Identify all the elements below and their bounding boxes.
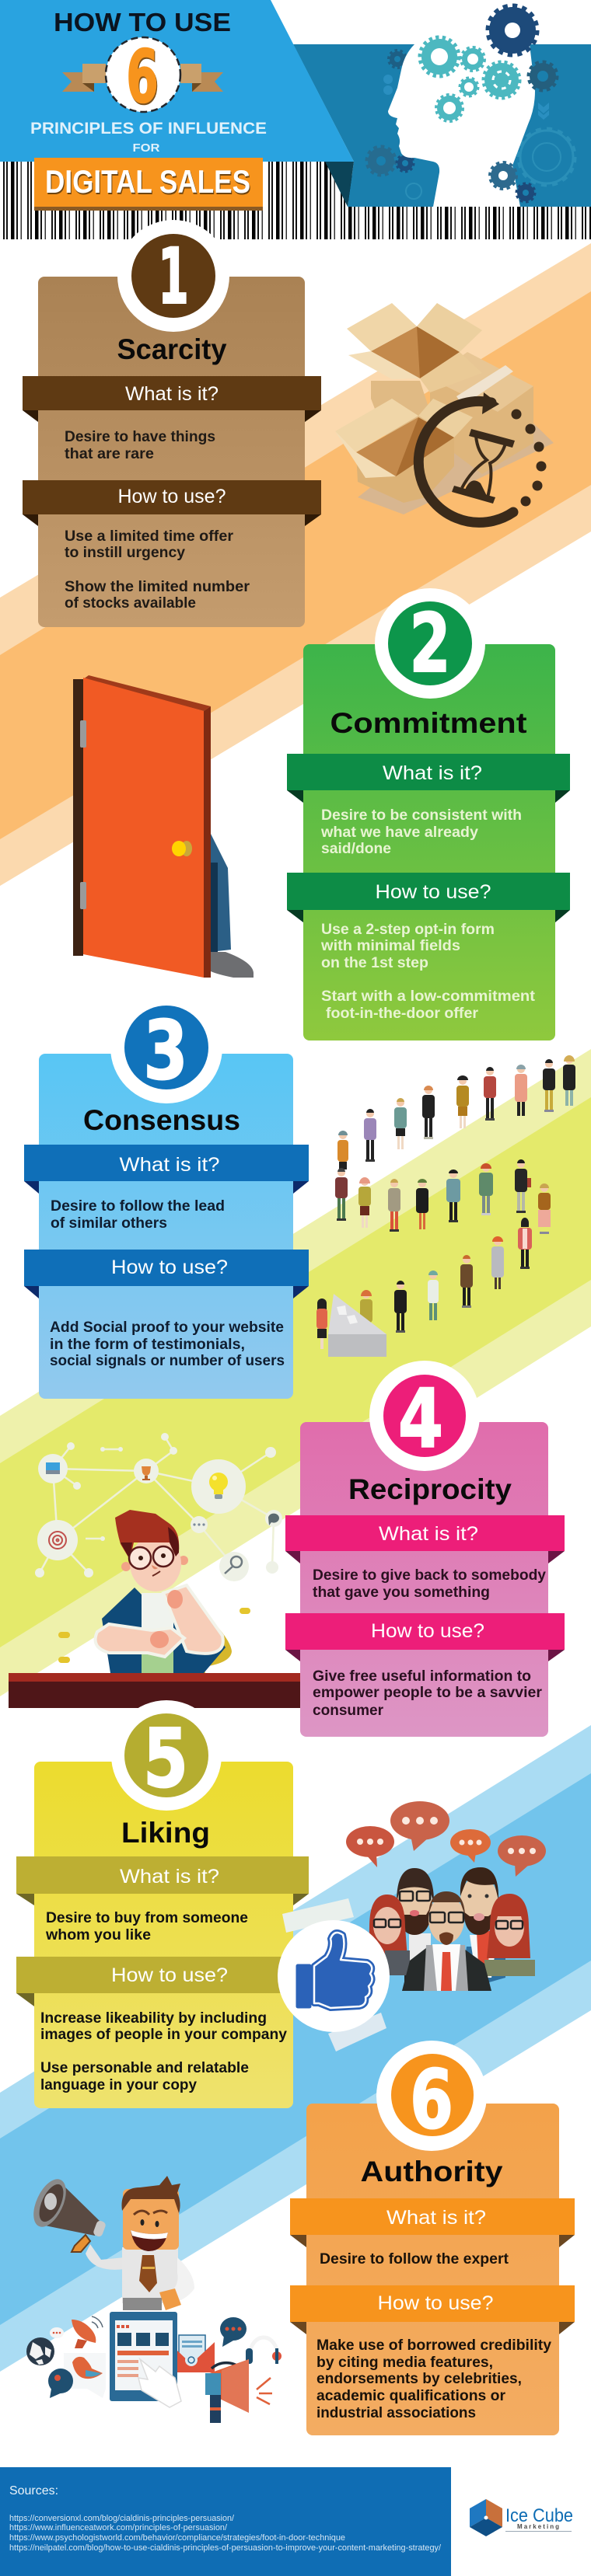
- illustration: door with foot: [73, 675, 254, 978]
- text: how to use liking: Increase likeability by including: [40, 2010, 267, 2027]
- panel: reciprocity: [285, 1361, 565, 1737]
- text: how to use scarcity: Use a limited time offer: [65, 528, 234, 545]
- leg behind door: [211, 834, 254, 978]
- panel: consensus: [24, 992, 309, 1399]
- icon: satellite dish: [72, 2316, 103, 2348]
- badge: number 5: 5: [143, 1711, 188, 1806]
- dark blue band with head: [293, 44, 591, 207]
- ribbon: what is it: [285, 1515, 565, 1563]
- ribbon: how to use: [285, 1613, 565, 1661]
- heading: scarcity: Scarcity: [117, 333, 227, 365]
- icon: headset: [246, 2337, 282, 2364]
- speech bubbles: [346, 1801, 546, 1877]
- orange box: digital sales: DIGITAL SALES: [45, 163, 250, 200]
- badge: number 3: [110, 992, 222, 1103]
- badge: number 4: 4: [398, 1372, 443, 1466]
- text: how to use authority: industrial associations: [316, 2405, 476, 2421]
- text: how to use consensus: in the form of testimonials,: [50, 1337, 245, 1353]
- illustration: man with megaphone and media icons: [26, 2174, 282, 2423]
- text: how to use liking: Use personable and relatable: [40, 2060, 249, 2076]
- badge: number 6: [106, 35, 180, 120]
- ribbon: what is it: What is it?: [120, 1866, 219, 1888]
- icon: orange megaphone: [205, 2359, 272, 2423]
- text: how to use authority: academic qualifications or: [316, 2388, 506, 2404]
- text: what is reciprocity: that gave you something: [313, 1584, 490, 1601]
- text: what is reciprocity: [313, 1567, 546, 1601]
- closed box: [430, 352, 533, 474]
- panel: authority: [290, 2041, 575, 2435]
- text: how to use scarcity: Show the limited number: [65, 579, 250, 595]
- text: how to use authority: [316, 2337, 551, 2421]
- heading: liking: Liking: [121, 1817, 210, 1849]
- ribbon: what is it: What is it?: [125, 383, 219, 405]
- idea network: [35, 1433, 282, 1581]
- ribbon: what is it: [287, 754, 570, 803]
- badge: number 6: 6: [410, 2052, 453, 2147]
- heading: authority: Authority: [361, 2156, 503, 2187]
- ribbon: what is it: What is it?: [379, 1523, 478, 1545]
- ribbon: how to use: How to use?: [111, 1257, 228, 1278]
- text: what is commitment: [320, 807, 522, 857]
- ribbon: what is it: What is it?: [383, 762, 482, 784]
- subheading: for: FOR: [132, 141, 160, 155]
- ribbon behind the 6 badge: [62, 64, 223, 92]
- heading: how to use: HOW TO USE: [54, 8, 231, 37]
- ribbon: how to use: How to use?: [111, 1964, 228, 1986]
- ribbon: what is it: What is it?: [386, 2207, 486, 2229]
- text: how to use consensus: [50, 1319, 285, 1369]
- source links: https://www.influenceatwork.com/principles-of-persuasion/: [9, 2523, 228, 2532]
- icon: light bulb: [209, 1473, 228, 1499]
- text: how to use authority: endorsements by celebrities,: [316, 2371, 522, 2387]
- ribbon: how to use: [287, 873, 570, 922]
- badge: number 3: 3: [143, 1003, 188, 1098]
- text: what is consensus: of similar others: [51, 1215, 167, 1232]
- text: how to use consensus: Add Social proof to your website: [50, 1319, 284, 1336]
- text: how to use authority: by citing media features,: [316, 2355, 493, 2371]
- text: what is consensus: Desire to follow the lead: [51, 1198, 225, 1215]
- badge: number 6: 6: [126, 35, 159, 120]
- background: orange diagonal bands: [0, 243, 591, 886]
- ribbon: how to use: [24, 1250, 309, 1298]
- ribbon: how to use: [16, 1957, 309, 2006]
- text: what is scarcity: that are rare: [65, 446, 154, 462]
- yellow pills: [58, 1608, 250, 1663]
- panel: scarcity: [23, 220, 321, 627]
- badge: number 2: [375, 588, 485, 699]
- centre man: [402, 1891, 491, 1991]
- text: what is liking: whom you like: [45, 1927, 151, 1943]
- man: [96, 1510, 232, 1673]
- text: how to use commitment: [320, 922, 536, 1022]
- barcode strip: [0, 162, 591, 239]
- icon: small bubble: [50, 2327, 64, 2338]
- subheading: principles of influence: PRINCIPLES OF INFLUENCE: [30, 120, 267, 138]
- text: what is commitment: Desire to be consistent with: [321, 807, 522, 824]
- icon: globe: [26, 2337, 54, 2365]
- illustration: cardboard boxes and hourglass: [335, 303, 554, 522]
- text: how to use reciprocity: consumer: [313, 1703, 384, 1719]
- text: how to use scarcity: to instill urgency: [65, 545, 185, 561]
- desk: [9, 1673, 300, 1708]
- text: how to use reciprocity: empower people to be a savvier: [313, 1685, 543, 1701]
- icon: wifi: [212, 2363, 241, 2381]
- text: what is consensus: [51, 1198, 225, 1232]
- text: how to use commitment: Start with a low-commitment: [321, 988, 536, 1005]
- ribbon: how to use: How to use?: [118, 486, 226, 507]
- header panel: [0, 0, 591, 211]
- ribbon: how to use: How to use?: [375, 881, 491, 903]
- text: how to use liking: [40, 2010, 287, 2093]
- icon: magnifier: [225, 1556, 242, 1574]
- icon: trophy: [142, 1466, 151, 1480]
- text: what is scarcity: [65, 429, 215, 462]
- badge: number 1: [117, 220, 229, 332]
- icon: chat bubble: [220, 2317, 247, 2347]
- reception desk with attendant: [316, 1294, 386, 1357]
- text: how to use commitment: on the 1st step: [321, 955, 428, 971]
- text: what is liking: Desire to buy from someone: [46, 1910, 248, 1926]
- source links: https://neilpatel.com/blog/how-to-use-cialdinis-principles-of-persuasion-to-improve-your-content-marketing-strategy/: [9, 2543, 442, 2553]
- badge: number 5: [111, 1700, 222, 1811]
- door knob: [172, 841, 192, 856]
- panel: liking: [16, 1700, 309, 2108]
- text: how to use scarcity: [65, 528, 250, 612]
- text: how to use commitment: with minimal fields: [320, 938, 460, 954]
- badge: number 2: 2: [409, 596, 451, 691]
- panel: commitment: [287, 588, 570, 1041]
- icon: email: [177, 2335, 215, 2372]
- icon: speech bubble: [268, 1514, 279, 1525]
- hourglass: [452, 429, 515, 504]
- text: what is reciprocity: Desire to give back to somebody: [313, 1567, 546, 1584]
- text: what is authority: Desire to follow the expert: [320, 2251, 509, 2268]
- ribbon: how to use: [23, 480, 321, 526]
- orange box: digital sales: [34, 158, 263, 211]
- icon: dots: [193, 1523, 205, 1526]
- icon: social bubble with bird: [48, 2353, 106, 2398]
- background: blue diagonal bands: [0, 1725, 591, 2372]
- text: how to use commitment: Use a 2-step opt-in form: [321, 922, 495, 938]
- background: yellow diagonal bands: [0, 1049, 591, 1696]
- ribbon: what is it: What is it?: [120, 1154, 219, 1176]
- megaphone: [27, 2174, 107, 2252]
- text: what is commitment: what we have already: [320, 824, 478, 841]
- face: [115, 1510, 188, 1591]
- heading: sources: Sources:: [9, 2484, 58, 2498]
- text: what is commitment: said/done: [321, 841, 391, 857]
- text: what is scarcity: Desire to have things: [65, 429, 215, 445]
- logo cube: [470, 2499, 502, 2536]
- logo: ice cube marketing: Marketing: [517, 2523, 559, 2530]
- text: how to use scarcity: of stocks available: [65, 595, 196, 612]
- text: how to use authority: Make use of borrowed credibility: [316, 2337, 551, 2354]
- illustration: thinking man with idea network: [9, 1433, 300, 1708]
- heading: commitment: Commitment: [330, 707, 527, 739]
- text: how to use reciprocity: [313, 1668, 543, 1719]
- tablet: [110, 2312, 177, 2401]
- text: how to use liking: language in your copy: [40, 2077, 197, 2093]
- illustration: queue of people: [316, 1055, 575, 1357]
- heading: reciprocity: Reciprocity: [348, 1473, 512, 1505]
- clock arrow: [418, 392, 546, 522]
- text: how to use reciprocity: Give free useful information to: [313, 1668, 531, 1685]
- ribbon: how to use: [290, 2285, 575, 2334]
- illustration: group of people with speech bubbles: [346, 1801, 546, 1991]
- badge: number 1: 1: [158, 232, 189, 322]
- arms: [96, 1585, 223, 1657]
- ribbon: how to use: How to use?: [371, 1620, 484, 1642]
- man body: [86, 2176, 194, 2310]
- source links: https://conversionxl.com/blog/cialdinis-principles-persuasion/: [9, 2514, 235, 2523]
- women: [369, 1894, 535, 1976]
- text: how to use commitment: foot-in-the-door offer: [326, 1006, 479, 1022]
- text: what is liking: [45, 1910, 248, 1943]
- text: how to use consensus: social signals or number of users: [50, 1353, 285, 1369]
- pointing hand: [138, 2359, 181, 2407]
- icon: browser card: [46, 1462, 60, 1474]
- text: how to use liking: images of people in your company: [40, 2027, 287, 2043]
- icon: target: [49, 1532, 66, 1549]
- badge: number 4: [369, 1361, 480, 1471]
- source links: [9, 2514, 442, 2553]
- logo: ice cube marketing: Ice Cube: [505, 2505, 573, 2526]
- back men: [397, 1867, 505, 1989]
- ribbon: what is it: [23, 376, 321, 422]
- ribbon: what is it: [24, 1145, 309, 1194]
- faint background gears: [383, 75, 575, 199]
- icon: thumbs up badge: [278, 1898, 390, 2051]
- lower open box: [335, 399, 473, 503]
- gear: dark left gears: [367, 51, 414, 175]
- head gears: [420, 6, 557, 202]
- ribbon: what is it: [16, 1856, 309, 1905]
- upper open box: [347, 303, 482, 435]
- blue title panel: [0, 0, 354, 162]
- heading: consensus: Consensus: [83, 1104, 240, 1136]
- head silhouette: [388, 44, 535, 207]
- ribbon: how to use: How to use?: [378, 2292, 493, 2314]
- badge: number 6: [376, 2041, 487, 2151]
- source links: https://www.psychologistworld.com/behavior/compliance/strategies/foot-in-door-technique: [9, 2533, 345, 2543]
- footer: sources: [0, 2467, 451, 2576]
- ribbon: what is it: [290, 2198, 575, 2247]
- logo: ice cube marketing: [470, 2499, 573, 2536]
